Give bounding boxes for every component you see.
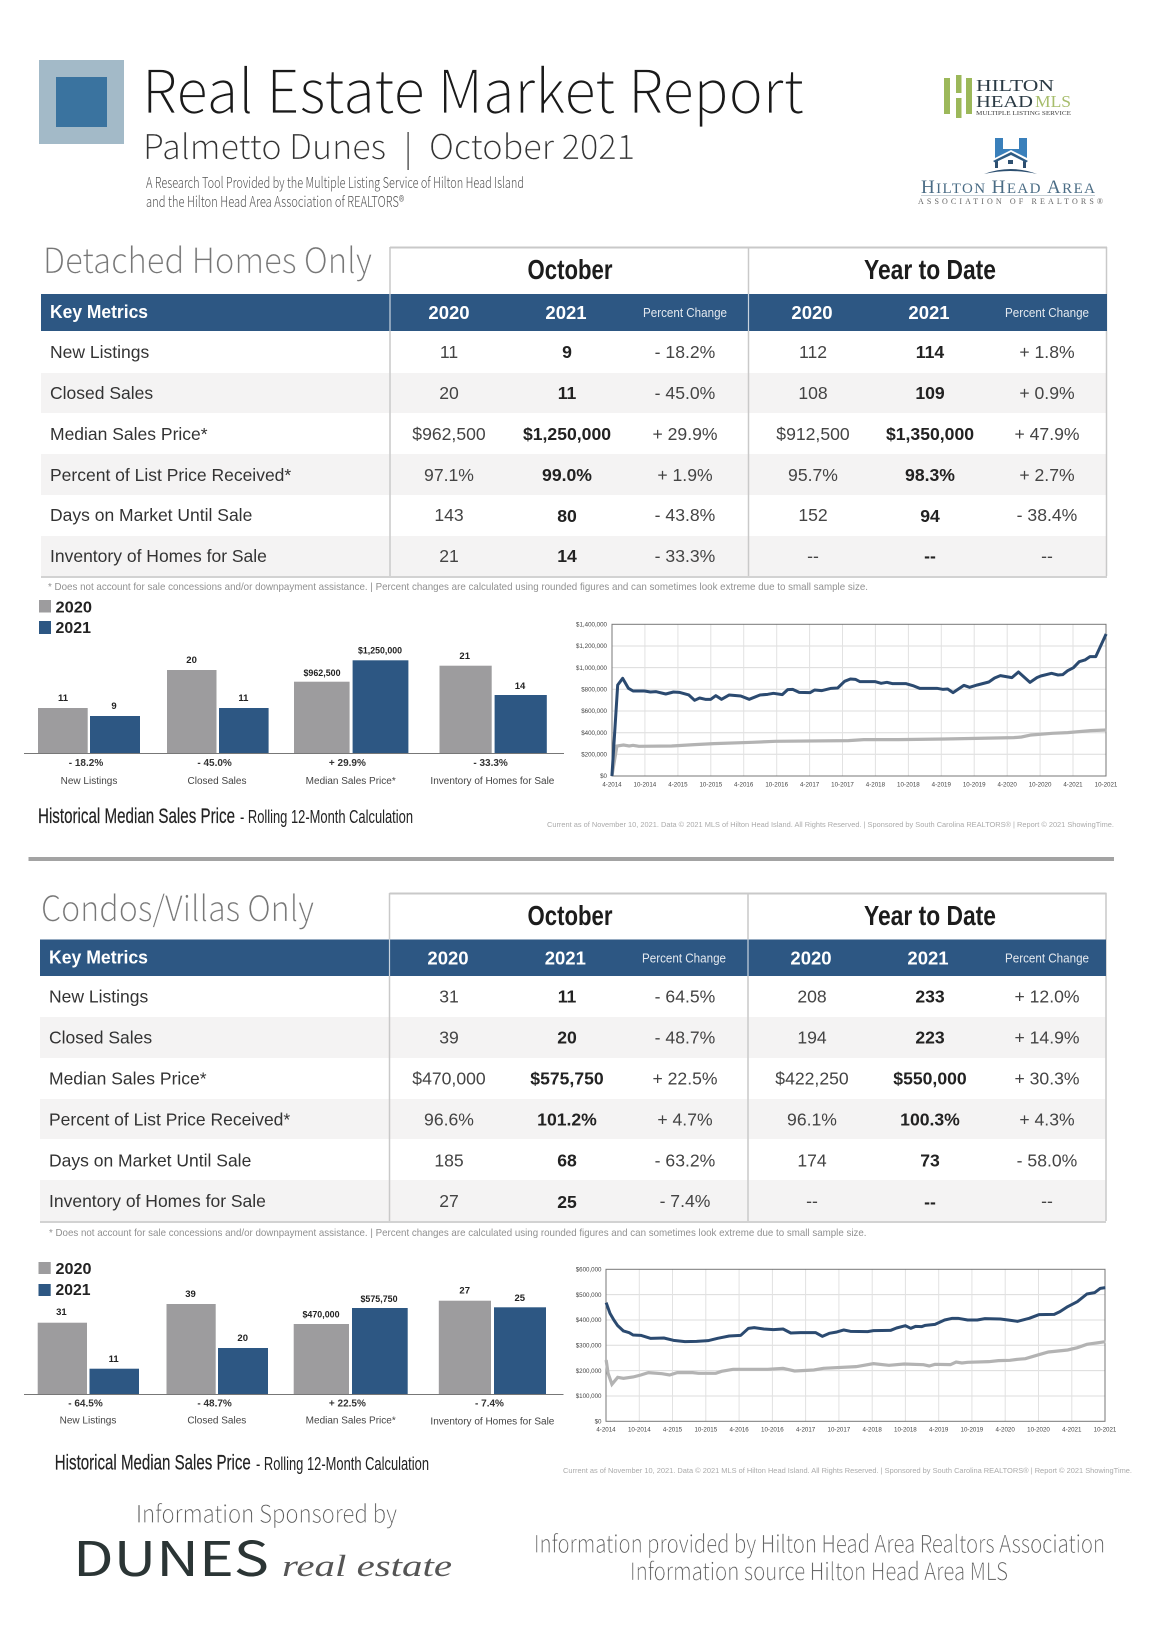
row: Percent of List Price Received: 101.2% <box>537 1110 597 1130</box>
panel: condos villas table <box>40 892 1106 1223</box>
text block: report description: A Research Tool Provided by the Multiple Listing Service of Hilton Head Island <box>146 172 524 193</box>
bars: Closed Sales: - 45.0% <box>197 758 232 769</box>
row: Inventory of Homes for Sale: 27 <box>439 1191 459 1211</box>
row: Inventory of Homes for Sale <box>49 1191 1053 1212</box>
row: New Listings: New Listings <box>49 986 148 1006</box>
y axis labels: $300,000 <box>576 1342 602 1350</box>
table row shading <box>41 373 1107 576</box>
y axis labels: $400,000 <box>576 1317 602 1324</box>
legend: detached homes: 2020 <box>56 600 92 616</box>
row: Closed Sales <box>49 1028 1080 1048</box>
footnote: detached homes: * Does not account for sale concessions and/or downpayment assistance. | Percent changes are calculated using rounded figures and can sometimes look extreme due to small sample size. <box>48 581 868 593</box>
text block: report description <box>146 172 524 212</box>
bars: New Listings: 31 <box>56 1307 67 1318</box>
row: Days on Market Until Sale: 80 <box>557 506 577 526</box>
logo: Dunes real estate: real estate <box>282 1548 452 1583</box>
bars: New Listings: 11 <box>109 1354 119 1365</box>
bars: Inventory of Homes for Sale: Inventory of Homes for Sale <box>430 1417 555 1428</box>
logo: Hilton Head Area Association of Realtors: HILTON HEAD AREA <box>921 177 1095 198</box>
row: Closed Sales: 20 <box>439 383 459 403</box>
bars: Inventory of Homes for Sale <box>430 1286 555 1428</box>
bars: New Listings: New Listings <box>60 1416 116 1427</box>
line: all of area median price <box>612 730 1106 776</box>
row: Median Sales Price: Median Sales Price* <box>50 424 208 444</box>
logo: Hilton Head MLS: HILTON <box>976 76 1054 95</box>
row: Percent of List Price Received: + 4.3% <box>1019 1110 1075 1130</box>
x axis labels: 4-2014 <box>596 1427 616 1434</box>
row: Median Sales Price: $550,000 <box>893 1068 967 1088</box>
x axis labels: 4-2017 <box>796 1427 816 1434</box>
row: Median Sales Price: $912,500 <box>776 424 850 444</box>
row: Days on Market Until Sale: 152 <box>798 505 828 525</box>
x axis labels: 4-2021 <box>1063 782 1083 789</box>
logo: Hilton Head MLS <box>944 75 1071 118</box>
row: Closed Sales: 39 <box>439 1028 459 1048</box>
row: Inventory of Homes for Sale: -- <box>924 1192 936 1212</box>
line chart: detached homes historical median sales price <box>576 622 1118 789</box>
row: Inventory of Homes for Sale: 21 <box>439 546 459 566</box>
bars: New Listings: - 64.5% <box>68 1399 103 1410</box>
bars: New Listings: 9 <box>111 701 117 712</box>
row: Percent of List Price Received: + 4.7% <box>657 1110 713 1130</box>
period headings: October <box>528 254 613 285</box>
table row shading <box>40 1017 1106 1221</box>
x axis labels: 4-2020 <box>996 1427 1015 1434</box>
row: Percent of List Price Received: 95.7% <box>788 465 838 485</box>
row: Days on Market Until Sale: 174 <box>797 1150 827 1170</box>
bars: Inventory of Homes for Sale: 14 <box>515 681 526 692</box>
bars: Median Sales Price: $575,750 <box>360 1294 398 1305</box>
bar chart: detached homes key metrics <box>24 646 564 787</box>
legend: condos villas <box>38 1261 92 1299</box>
bars: Median Sales Price <box>294 1294 408 1427</box>
row: Percent of List Price Received <box>49 1110 1075 1130</box>
x axis labels: 4-2020 <box>998 782 1017 789</box>
row: Percent of List Price Received: 99.0% <box>542 465 592 485</box>
row: Inventory of Homes for Sale: Inventory of Homes for Sale <box>49 1191 266 1211</box>
row: Percent of List Price Received: Percent of List Price Received* <box>49 1110 290 1130</box>
x axis labels: 10-2020 <box>1029 782 1052 789</box>
x axis labels <box>596 1427 1117 1434</box>
y axis labels: $600,000 <box>576 1266 602 1274</box>
credit line: detached homes: Current as of November 10, 2021. Data © 2021 MLS of Hilton Head Island. All Rights Reserved. | Sponsored by South Carolina REALTORS® | Report © 2021 ShowingTime. <box>547 820 1114 829</box>
period headings: Year to Date <box>864 900 996 931</box>
bars: Closed Sales: 11 <box>238 693 249 704</box>
x axis labels: 4-2018 <box>866 782 886 789</box>
row: Percent of List Price Received: Percent of List Price Received* <box>50 465 291 485</box>
row: Days on Market Until Sale: - 63.2% <box>655 1150 716 1170</box>
credit line: condos villas: Current as of November 10, 2021. Data © 2021 MLS of Hilton Head Island. All Rights Reserved. | Sponsored by South Carolina REALTORS® | Report © 2021 ShowingTime. <box>563 1466 1132 1475</box>
table column rules <box>41 246 1107 578</box>
row: Inventory of Homes for Sale: Inventory of Homes for Sale <box>50 546 267 566</box>
period headings <box>528 900 996 931</box>
row: Inventory of Homes for Sale <box>50 546 1053 566</box>
row: Days on Market Until Sale: - 58.0% <box>1017 1150 1078 1170</box>
x axis labels: 10-2021 <box>1095 782 1118 789</box>
x axis labels: 4-2019 <box>929 1427 949 1434</box>
x axis labels: 4-2015 <box>668 782 688 789</box>
y axis labels: $1,000,000 <box>576 665 608 672</box>
row: Median Sales Price: + 30.3% <box>1014 1068 1080 1088</box>
bars: Median Sales Price: Median Sales Price* <box>306 1416 396 1427</box>
x axis labels: 4-2019 <box>932 782 951 789</box>
period headings: October <box>528 900 613 931</box>
bars: Inventory of Homes for Sale: 27 <box>459 1286 470 1297</box>
row: Closed Sales: - 45.0% <box>655 383 716 403</box>
table header row: 2020 <box>427 948 469 968</box>
x axis labels: 10-2018 <box>897 782 920 789</box>
row: Days on Market Until Sale: - 43.8% <box>655 505 716 525</box>
bars: Inventory of Homes for Sale: 21 <box>459 651 471 662</box>
y axis labels <box>576 1266 602 1426</box>
table header row: 2020 <box>790 948 832 968</box>
x axis labels: 4-2021 <box>1062 1427 1082 1434</box>
logo: Hilton Head Area Association of Realtors <box>918 138 1103 206</box>
row: Percent of List Price Received: 96.6% <box>424 1110 474 1130</box>
row: Days on Market Until Sale <box>50 505 1078 526</box>
row: Percent of List Price Received: 96.1% <box>787 1110 837 1130</box>
bars: Inventory of Homes for Sale: Inventory of Homes for Sale <box>430 776 555 787</box>
x axis labels: 4-2016 <box>734 782 754 789</box>
row: Days on Market Until Sale <box>49 1150 1078 1170</box>
row: Inventory of Homes for Sale: -- <box>924 546 936 566</box>
row: Closed Sales: 109 <box>915 383 945 403</box>
row: New Listings: New Listings <box>50 342 149 362</box>
y axis labels: $0 <box>595 1418 602 1426</box>
row: Closed Sales: 108 <box>798 383 828 403</box>
row: Closed Sales <box>50 383 1075 403</box>
line: community median price <box>606 1288 1105 1342</box>
y axis labels: $800,000 <box>581 686 608 694</box>
subtitle: community and month <box>143 120 635 170</box>
row: New Listings: 114 <box>916 342 944 362</box>
bars: Closed Sales <box>167 655 269 787</box>
bars: Median Sales Price: + 29.9% <box>329 758 366 769</box>
row: Median Sales Price: $575,750 <box>530 1068 604 1088</box>
x axis labels: 4-2017 <box>800 782 820 789</box>
x axis labels: 10-2019 <box>961 1427 984 1434</box>
row: New Listings <box>50 342 1075 362</box>
bars: Inventory of Homes for Sale: - 7.4% <box>475 1399 504 1410</box>
bars: Median Sales Price: + 22.5% <box>329 1399 366 1410</box>
row: Inventory of Homes for Sale: - 33.3% <box>655 546 716 566</box>
bar chart: condos villas key metrics <box>24 1286 564 1428</box>
y axis labels: $100,000 <box>576 1393 602 1400</box>
bars: New Listings <box>38 1307 139 1427</box>
row: Days on Market Until Sale: 73 <box>920 1150 940 1170</box>
x axis labels: 10-2014 <box>634 782 657 789</box>
chart heading: historical median sales price: Historical Median Sales Price <box>38 804 235 828</box>
table header row: 2020 <box>791 302 833 323</box>
bars: Closed Sales: Closed Sales <box>187 1416 246 1427</box>
table header row: Key Metrics <box>49 948 148 968</box>
chart heading: historical median sales price: - Rolling 12-Month Calculation <box>256 1454 429 1474</box>
x axis labels: 10-2021 <box>1094 1427 1117 1434</box>
row: Median Sales Price: + 29.9% <box>652 424 718 444</box>
text block: report description: and the Hilton Head Area Association of REALTORS® <box>146 191 404 212</box>
table header row: Percent Change <box>642 950 726 966</box>
text block: information sources <box>534 1525 1105 1587</box>
logo: Hilton Head MLS: MULTIPLE LISTING SERVICE <box>976 110 1071 117</box>
period headings <box>528 254 996 285</box>
row: New Listings: 233 <box>915 986 945 1006</box>
table header row: 2021 <box>545 948 586 968</box>
row: Median Sales Price: + 47.9% <box>1014 424 1080 444</box>
row: New Listings: 11 <box>440 342 458 362</box>
x axis labels: 10-2019 <box>963 782 986 789</box>
bars: Median Sales Price: Median Sales Price* <box>306 776 396 787</box>
row: Percent of List Price Received <box>50 465 1075 485</box>
y axis labels: $200,000 <box>576 1368 602 1375</box>
x axis labels: 10-2016 <box>765 782 789 789</box>
row: Inventory of Homes for Sale: -- <box>807 546 819 566</box>
row: Median Sales Price: $962,500 <box>412 424 486 444</box>
x axis labels: 10-2018 <box>894 1427 917 1434</box>
row: New Listings: + 1.8% <box>1019 342 1075 362</box>
bars: New Listings <box>38 693 140 787</box>
y axis labels: $1,200,000 <box>576 643 608 650</box>
x axis labels <box>602 782 1118 789</box>
row: Days on Market Until Sale: 185 <box>434 1150 464 1170</box>
logo: Hilton Head MLS: MLS <box>1035 92 1071 111</box>
row: Closed Sales: + 0.9% <box>1019 383 1075 403</box>
legend: detached homes <box>39 600 92 637</box>
row: New Listings: 11 <box>558 986 577 1006</box>
row: Percent of List Price Received: + 1.9% <box>657 465 713 485</box>
chart heading: historical median sales price: - Rolling 12-Month Calculation <box>240 807 413 827</box>
heading: Detached Homes Only: Detached Homes Only <box>43 233 372 284</box>
row: New Listings: 208 <box>797 986 827 1006</box>
row: Inventory of Homes for Sale: 25 <box>557 1192 577 1212</box>
y axis labels <box>576 622 608 780</box>
heading: Condos/Villas Only: Condos/Villas Only <box>41 881 314 932</box>
table header row <box>40 940 1106 976</box>
row: Days on Market Until Sale: 94 <box>920 506 940 526</box>
x axis labels: 4-2016 <box>729 1427 749 1434</box>
row: Days on Market Until Sale: Days on Market Until Sale <box>50 505 252 525</box>
bars: Inventory of Homes for Sale: - 33.3% <box>473 758 508 769</box>
row: Closed Sales: + 14.9% <box>1014 1028 1080 1048</box>
bars: Inventory of Homes for Sale <box>430 651 555 787</box>
x axis labels: 10-2020 <box>1027 1427 1050 1434</box>
x axis labels: 10-2015 <box>699 782 723 789</box>
subtitle: community and month: October 2021 <box>429 120 635 169</box>
row: Closed Sales: 20 <box>557 1028 577 1048</box>
line chart: condos villas historical median sales price <box>576 1266 1117 1434</box>
row: Closed Sales: 194 <box>797 1028 827 1048</box>
table header row: 2021 <box>908 302 950 323</box>
bars: New Listings: New Listings <box>61 776 117 787</box>
bars: Median Sales Price: $962,500 <box>304 668 340 679</box>
table column rules <box>40 892 1106 1223</box>
row: Median Sales Price <box>49 1068 1080 1088</box>
logo: Dunes real estate: DUNES <box>73 1520 269 1590</box>
row: New Listings: 31 <box>439 986 459 1006</box>
bars: New Listings: 11 <box>58 693 69 704</box>
bars: Closed Sales: 20 <box>237 1333 248 1344</box>
row: Inventory of Homes for Sale: 14 <box>557 546 577 566</box>
row: Median Sales Price: + 22.5% <box>652 1068 718 1088</box>
icon: nested blue squares <box>39 60 124 144</box>
line: all of area median price <box>606 1342 1105 1384</box>
bars: Median Sales Price: $470,000 <box>302 1310 340 1321</box>
table header row: 2020 <box>428 302 470 323</box>
x axis labels: 4-2018 <box>863 1427 882 1434</box>
bars: Inventory of Homes for Sale: 25 <box>515 1293 526 1304</box>
bars: Median Sales Price: $1,250,000 <box>358 646 402 657</box>
table header row: Key Metrics <box>50 302 148 322</box>
bars: Closed Sales: 20 <box>186 655 197 666</box>
row: Days on Market Until Sale: Days on Market Until Sale <box>49 1150 251 1170</box>
row: Inventory of Homes for Sale: -- <box>1041 546 1053 566</box>
bars: Closed Sales: 39 <box>185 1289 196 1300</box>
row: Median Sales Price <box>50 424 1080 444</box>
footnote: condos villas: * Does not account for sale concessions and/or downpayment assistance. | Percent changes are calculated using rounded figures and can sometimes look extreme due to small sample size. <box>49 1227 866 1239</box>
x axis labels: 10-2015 <box>694 1427 718 1434</box>
row: New Listings: 9 <box>562 342 572 362</box>
row: Percent of List Price Received: 97.1% <box>424 465 474 485</box>
row: Median Sales Price: Median Sales Price* <box>49 1068 207 1088</box>
legend: condos villas: 2020 <box>56 1261 92 1278</box>
row: Closed Sales: 223 <box>915 1028 945 1048</box>
y axis labels: $600,000 <box>581 708 608 715</box>
row: Closed Sales: Closed Sales <box>50 383 153 403</box>
row: Median Sales Price: $1,250,000 <box>523 424 611 444</box>
chart heading: historical median sales price: Historical Median Sales Price <box>55 1450 251 1474</box>
table header row <box>41 294 1107 331</box>
row: Percent of List Price Received: + 2.7% <box>1019 465 1075 485</box>
x axis labels: 10-2016 <box>761 1427 784 1434</box>
legend: condos villas: 2021 <box>56 1282 91 1299</box>
table header row: Percent Change <box>1005 950 1089 966</box>
y axis labels: $0 <box>600 773 608 780</box>
y axis labels: $400,000 <box>581 730 608 737</box>
row: Percent of List Price Received: 98.3% <box>905 465 955 485</box>
row: Percent of List Price Received: 100.3% <box>900 1110 960 1130</box>
row: Closed Sales: - 48.7% <box>655 1028 716 1048</box>
y axis labels: $200,000 <box>581 752 608 758</box>
row: Median Sales Price: $470,000 <box>412 1068 486 1088</box>
x axis labels: 10-2014 <box>628 1427 651 1434</box>
period headings: Year to Date <box>864 254 996 285</box>
row: New Listings: 112 <box>799 342 827 362</box>
logo: Dunes real estate <box>73 1520 452 1590</box>
x axis labels: 4-2015 <box>663 1427 683 1434</box>
table header row: Percent Change <box>643 305 727 320</box>
table header row: 2021 <box>907 948 949 968</box>
subtitle: community and month: Palmetto Dunes <box>143 120 386 169</box>
logo: Hilton Head MLS: HEAD <box>976 92 1033 111</box>
row: Days on Market Until Sale: 143 <box>434 505 464 525</box>
title: Real Estate Market Report <box>142 44 804 131</box>
row: Days on Market Until Sale: 68 <box>557 1150 577 1170</box>
y axis labels: $500,000 <box>576 1292 602 1299</box>
row: Inventory of Homes for Sale: - 7.4% <box>660 1191 711 1211</box>
row: Median Sales Price: $1,350,000 <box>886 424 974 444</box>
y axis labels: $1,400,000 <box>576 622 608 628</box>
sponsor heading: Information Sponsored by <box>136 1494 397 1530</box>
bars: Closed Sales <box>166 1289 268 1427</box>
row: Inventory of Homes for Sale: -- <box>1041 1191 1053 1211</box>
panel: detached homes table <box>41 246 1107 578</box>
table header row: 2021 <box>545 302 587 323</box>
bars: New Listings: - 18.2% <box>69 758 103 769</box>
x axis labels: 10-2017 <box>828 1427 851 1434</box>
bars: Closed Sales: Closed Sales <box>188 776 246 787</box>
legend: detached homes: 2021 <box>56 620 91 637</box>
row: New Listings: + 12.0% <box>1014 986 1080 1006</box>
table header row: Percent Change <box>1005 305 1089 320</box>
row: Inventory of Homes for Sale: -- <box>806 1191 818 1211</box>
row: New Listings: - 64.5% <box>655 986 716 1006</box>
row: Median Sales Price: $422,250 <box>775 1068 849 1088</box>
text block: information sources: Information source Hilton Head Area MLS <box>630 1552 1008 1587</box>
logo: Hilton Head Area Association of Realtors: ASSOCIATION OF REALTORS® <box>918 197 1103 206</box>
bars: Closed Sales: - 48.7% <box>197 1399 232 1410</box>
bars: Median Sales Price <box>294 646 408 787</box>
x axis labels: 10-2017 <box>831 782 854 789</box>
row: Closed Sales: 11 <box>558 383 577 403</box>
row: New Listings: - 18.2% <box>655 342 716 362</box>
x axis labels: 4-2014 <box>602 782 622 789</box>
row: Closed Sales: Closed Sales <box>49 1028 152 1048</box>
line: community median price <box>612 634 1106 776</box>
row: Days on Market Until Sale: - 38.4% <box>1017 505 1078 525</box>
row: New Listings <box>49 986 1080 1006</box>
